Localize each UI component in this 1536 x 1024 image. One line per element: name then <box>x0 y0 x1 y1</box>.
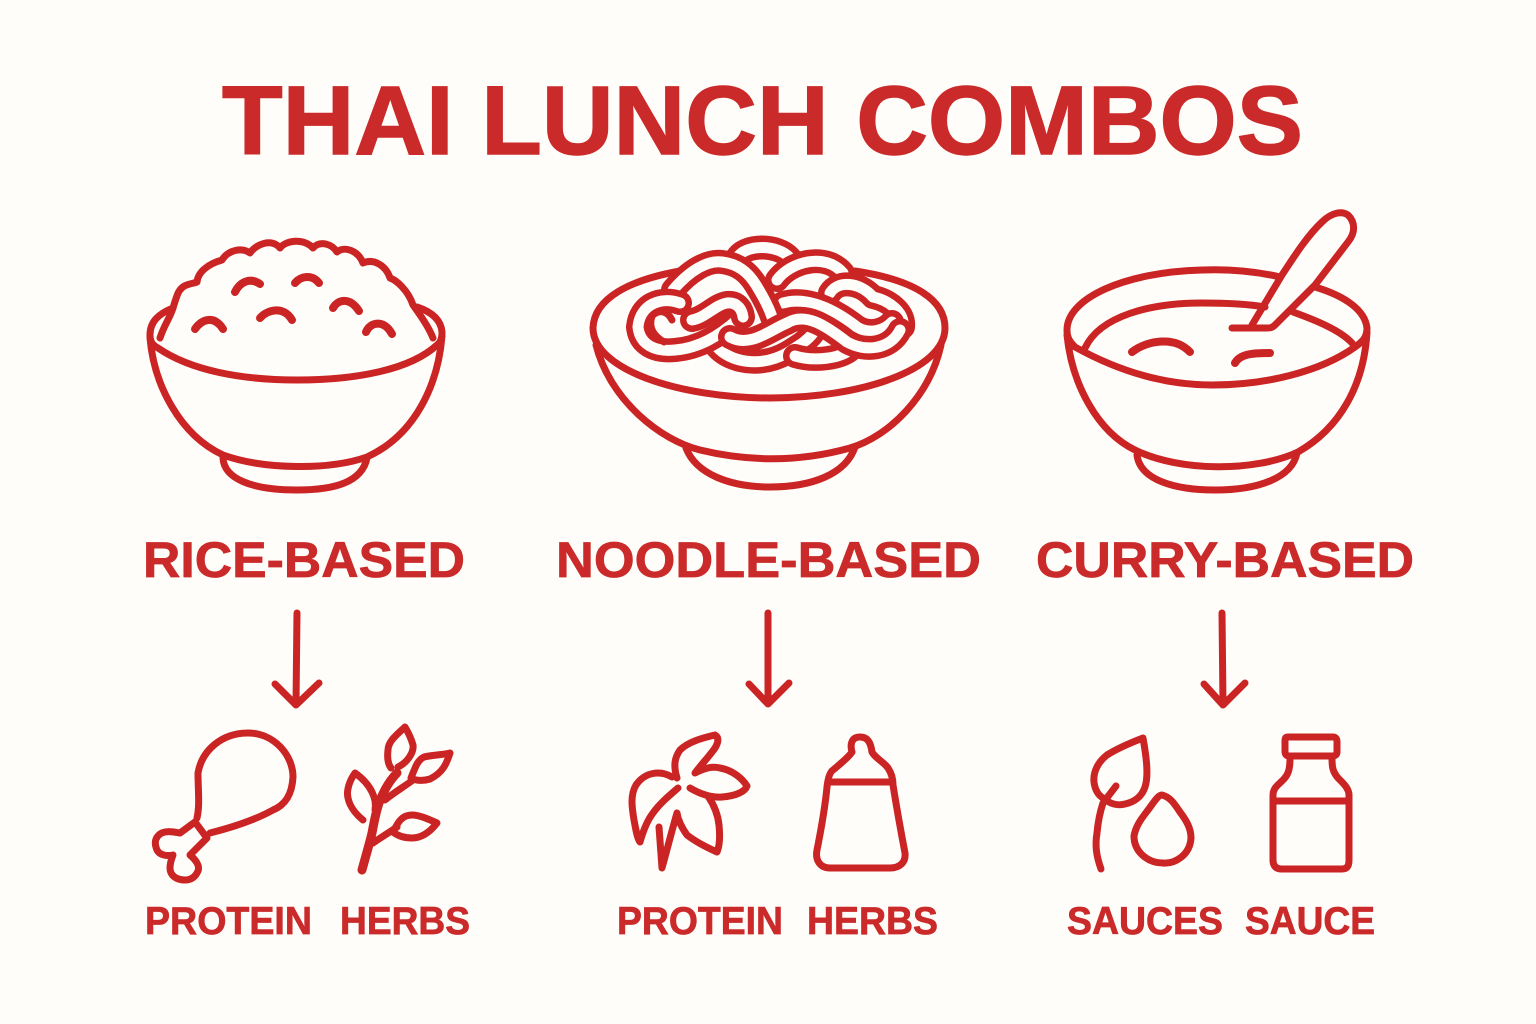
heading: rice-based: RICE-BASED <box>143 532 465 588</box>
noodle strands <box>638 248 903 362</box>
arrow: rice <box>275 613 319 705</box>
label: herbs: HERBS <box>807 900 938 943</box>
label: sauces: SAUCES <box>1067 900 1223 943</box>
label: protein: PROTEIN <box>145 900 312 943</box>
icon: squeeze bottle <box>817 737 905 868</box>
icon: herb sprig <box>347 727 450 870</box>
icon: leaf and drop <box>1094 738 1191 869</box>
arrow: noodle <box>749 613 789 704</box>
icon: rice bowl <box>150 241 442 490</box>
arrow: curry <box>1204 613 1245 705</box>
label: herbs: HERBS <box>340 900 470 943</box>
icon: basil leaf <box>632 735 747 868</box>
icon: noodle bowl <box>593 248 945 487</box>
icon: chicken drumstick <box>155 733 293 880</box>
icon: curry bowl <box>1067 213 1367 490</box>
heading: noodle-based: NOODLE-BASED <box>556 532 981 588</box>
icon: sauce jar <box>1273 737 1349 869</box>
label: sauce: SAUCE <box>1245 900 1375 943</box>
heading: curry-based: CURRY-BASED <box>1036 532 1414 588</box>
label: protein: PROTEIN <box>617 900 783 943</box>
title: THAI LUNCH COMBOS <box>222 66 1303 175</box>
